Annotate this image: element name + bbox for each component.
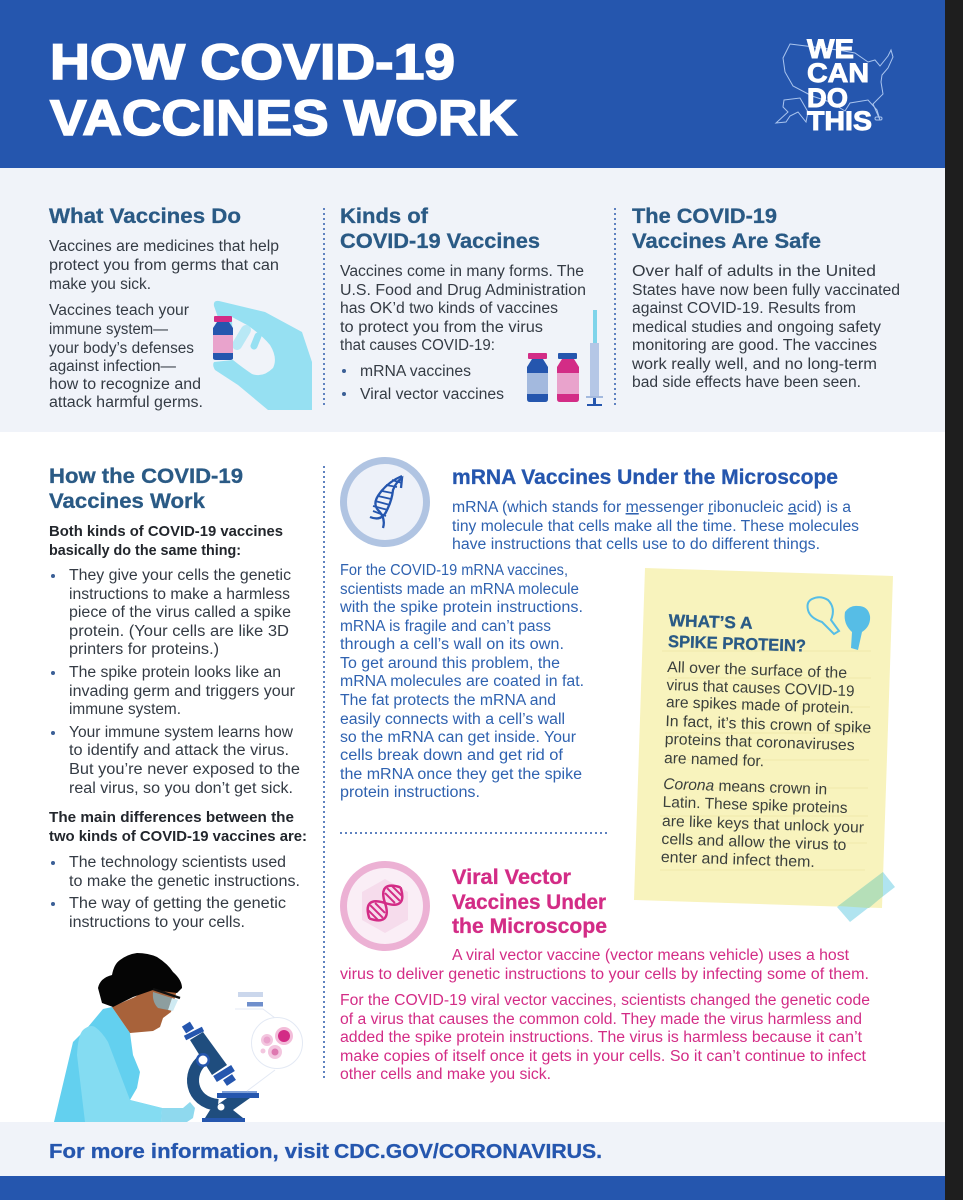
column: what vaccines do: against infection—	[49, 358, 176, 375]
icon: vials and syringe	[527, 310, 603, 406]
note text: are spikes made of protein.	[666, 694, 854, 717]
logo: We Can Do This	[776, 34, 893, 136]
panel: mRNA vaccines: so the mRNA can get inside. Your	[340, 729, 576, 746]
column: what vaccines do: how to recognize and	[49, 376, 201, 393]
panel: viral vector vaccines	[340, 861, 870, 1083]
panel: mRNA vaccines: mRNA molecules are coated in fat.	[340, 673, 584, 690]
logo: We Can Do This: CAN	[807, 58, 869, 88]
panel: viral vector vaccines: of a virus that causes the common cold. They made the virus harmless and	[340, 1011, 862, 1028]
panel: viral vector vaccines: virus to deliver genetic instructions to your cells by infecting some of them.	[340, 966, 869, 983]
panel: how the vaccines work: instructions to make a harmless	[69, 586, 290, 603]
column: kinds of vaccines	[340, 205, 586, 403]
panel: mRNA vaccines: with the spike protein instructions.	[339, 599, 583, 616]
panel: how the vaccines work: How the COVID-19	[49, 465, 243, 488]
column: what vaccines do: immune system—	[49, 321, 168, 338]
title: HOW COVID-19	[50, 34, 455, 90]
panel: viral vector vaccines: Vaccines Under	[452, 891, 606, 914]
column: vaccines are safe: work really well, and no long-term	[631, 356, 877, 373]
panel: viral vector vaccines: For the COVID-19 viral vector vaccines, scientists changed the genetic code	[340, 992, 870, 1009]
note text: proteins that coronaviruses	[664, 731, 855, 754]
column: vaccines are safe: Over half of adults in the United	[632, 263, 876, 280]
intro panel	[0, 168, 945, 432]
note text: Latin. These spike proteins	[662, 794, 848, 817]
column: vaccines are safe: against COVID-19. Results from	[632, 300, 856, 317]
footer band	[0, 1122, 945, 1200]
panel: mRNA vaccines: The fat protects the mRNA and	[340, 692, 556, 709]
column: kinds of vaccines: that causes COVID-19:	[340, 337, 495, 354]
panel: how the vaccines work: But you’re never exposed to the	[69, 761, 300, 778]
panel: how the vaccines work: The main differences between the	[49, 809, 294, 826]
panel: mRNA vaccines: the mRNA once they get the spike	[340, 766, 582, 783]
panel: viral vector vaccines: added the spike protein instructions. The virus is harmless because it can’t	[340, 1029, 863, 1046]
note text: Corona means crown in	[663, 776, 827, 798]
column: vaccines are safe: monitoring are good. The vaccines	[632, 337, 877, 354]
panel: mRNA vaccines: scientists made an mRNA molecule	[340, 581, 579, 598]
note text	[661, 611, 875, 873]
sample magnification bubble	[235, 992, 302, 1091]
column: kinds of vaccines: Kinds of	[340, 205, 429, 228]
panel: mRNA vaccines: mRNA (which stands for messenger ribonucleic acid) is a	[452, 499, 851, 516]
panel: how the vaccines work	[49, 465, 307, 931]
column: kinds of vaccines: U.S. Food and Drug Administration	[340, 282, 586, 299]
column: vaccines are safe: Vaccines Are Safe	[632, 230, 821, 253]
header banner	[0, 0, 945, 168]
panel: how the vaccines work: two kinds of COVID-19 vaccines are:	[49, 828, 307, 845]
panel: how the vaccines work: basically do the same thing:	[49, 542, 241, 559]
panel: how the vaccines work: The way of getting the genetic	[69, 895, 286, 912]
column: vaccines are safe: States have now been fully vaccinated	[632, 282, 900, 299]
panel: how the vaccines work: to identify and attack the virus.	[69, 742, 289, 759]
column: what vaccines do: Vaccines are medicines that help	[49, 238, 279, 255]
panel: mRNA vaccines: For the COVID-19 mRNA vaccines,	[340, 562, 568, 579]
panel: how the vaccines work: The spike protein looks like an	[69, 664, 281, 681]
panel: mRNA vaccines	[339, 457, 859, 801]
panel: how the vaccines work: protein. (Your cells are like 3D	[69, 623, 289, 640]
column: what vaccines do: protect you from germs that can	[49, 257, 279, 274]
panel: viral vector vaccines: Viral Vector	[452, 866, 571, 889]
note text: SPIKE PROTEIN?	[668, 632, 806, 656]
column: kinds of vaccines: mRNA vaccines	[360, 363, 471, 380]
column: vaccines are safe: bad side effects have been seen.	[632, 374, 861, 391]
column: what vaccines do: make you sick.	[49, 276, 151, 293]
logo: We Can Do This: WE	[807, 34, 854, 64]
note text: All over the surface of the	[667, 659, 847, 682]
callout: spike protein sticky note	[634, 568, 895, 922]
panel: how the vaccines work: The technology scientists used	[69, 854, 286, 871]
panel: mRNA vaccines: easily connects with a cell’s wall	[340, 711, 565, 728]
panel: how the vaccines work: to make the genetic instructions.	[69, 873, 300, 890]
column: kinds of vaccines: Viral vector vaccines	[360, 386, 504, 403]
column: kinds of vaccines: has OK’d two kinds of vaccines	[340, 300, 558, 317]
title	[50, 34, 517, 146]
panel: how the vaccines work: immune system.	[69, 701, 181, 718]
note text: virus that causes COVID-19	[666, 677, 855, 700]
panel: how the vaccines work: Vaccines Work	[49, 490, 205, 513]
panel: how the vaccines work: Your immune system learns how	[69, 724, 294, 741]
note text: are named for.	[664, 750, 764, 770]
column: what vaccines do: attack harmful germs.	[49, 394, 203, 411]
panel: how the vaccines work: piece of the virus called a spike	[69, 604, 291, 621]
tape	[837, 872, 895, 922]
panel: mRNA vaccines: protein instructions.	[340, 784, 480, 801]
panel: viral vector vaccines: make copies of itself once it gets in your cells. So it can’t continue to infect	[340, 1048, 867, 1065]
panel: viral vector vaccines: A viral vector vaccine (vector means vehicle) uses a host	[452, 947, 850, 964]
panel: mRNA vaccines: cells break down and get rid of	[340, 747, 564, 764]
title: VACCINES WORK	[50, 90, 517, 146]
note text: WHAT’S A	[668, 611, 753, 633]
logo: We Can Do This: THIS	[807, 106, 872, 136]
panel: mRNA vaccines: through a cell’s wall on its own.	[340, 636, 564, 653]
panel: viral vector vaccines: other cells and make you sick.	[340, 1066, 551, 1083]
icon: mRNA strand	[340, 457, 430, 547]
illustration: scientist at microscope	[54, 953, 302, 1122]
note text: cells and allow the virus to	[661, 831, 847, 854]
icon: viral vector DNA	[340, 861, 430, 951]
panel: viral vector vaccines: the Microscope	[452, 915, 607, 938]
spike icons	[808, 597, 870, 650]
column: what vaccines do	[49, 205, 279, 411]
panel: how the vaccines work: invading germ and triggers your	[69, 683, 295, 700]
icon: hand holding vial	[213, 301, 312, 410]
panel: how the vaccines work: They give your cells the genetic	[69, 567, 291, 584]
column: kinds of vaccines: Vaccines come in many forms. The	[340, 263, 584, 280]
column: kinds of vaccines: to protect you from the virus	[340, 319, 543, 336]
panel: how the vaccines work: printers for proteins.)	[69, 641, 219, 658]
microscope	[184, 1025, 259, 1122]
column: what vaccines do: Vaccines teach your	[49, 302, 189, 319]
column: vaccines are safe: medical studies and ongoing safety	[632, 319, 881, 336]
panel: how the vaccines work: instructions to your cells.	[69, 914, 245, 931]
panel: how the vaccines work: Both kinds of COVID-19 vaccines	[49, 523, 283, 540]
panel: how the vaccines work: real virus, so you don’t get sick.	[69, 780, 293, 797]
column: kinds of vaccines: COVID-19 Vaccines	[340, 230, 540, 253]
panel: mRNA vaccines: tiny molecule that cells make all the time. These molecules	[452, 518, 859, 535]
column: vaccines are safe: The COVID-19	[632, 205, 777, 228]
footer band: CDC.GOV/CORONAVIRUS.	[334, 1141, 602, 1163]
column: vaccines are safe	[631, 205, 900, 391]
footer band: For more information, visit	[49, 1141, 329, 1163]
column: what vaccines do: your body’s defenses	[49, 340, 194, 357]
column: what vaccines do: What Vaccines Do	[49, 205, 241, 228]
note text: enter and infect them.	[661, 849, 815, 871]
panel: mRNA vaccines: mRNA Vaccines Under the Microscope	[452, 466, 838, 489]
scientist	[54, 953, 195, 1122]
note text: are like keys that unlock your	[662, 813, 864, 837]
panel: mRNA vaccines: have instructions that cells use to do different things.	[452, 536, 820, 553]
logo: We Can Do This: DO	[807, 83, 848, 113]
note text: In fact, it’s this crown of spike	[665, 713, 872, 737]
panel: mRNA vaccines: To get around this problem, the	[340, 655, 560, 672]
panel: mRNA vaccines: mRNA is fragile and can’t pass	[340, 618, 551, 635]
